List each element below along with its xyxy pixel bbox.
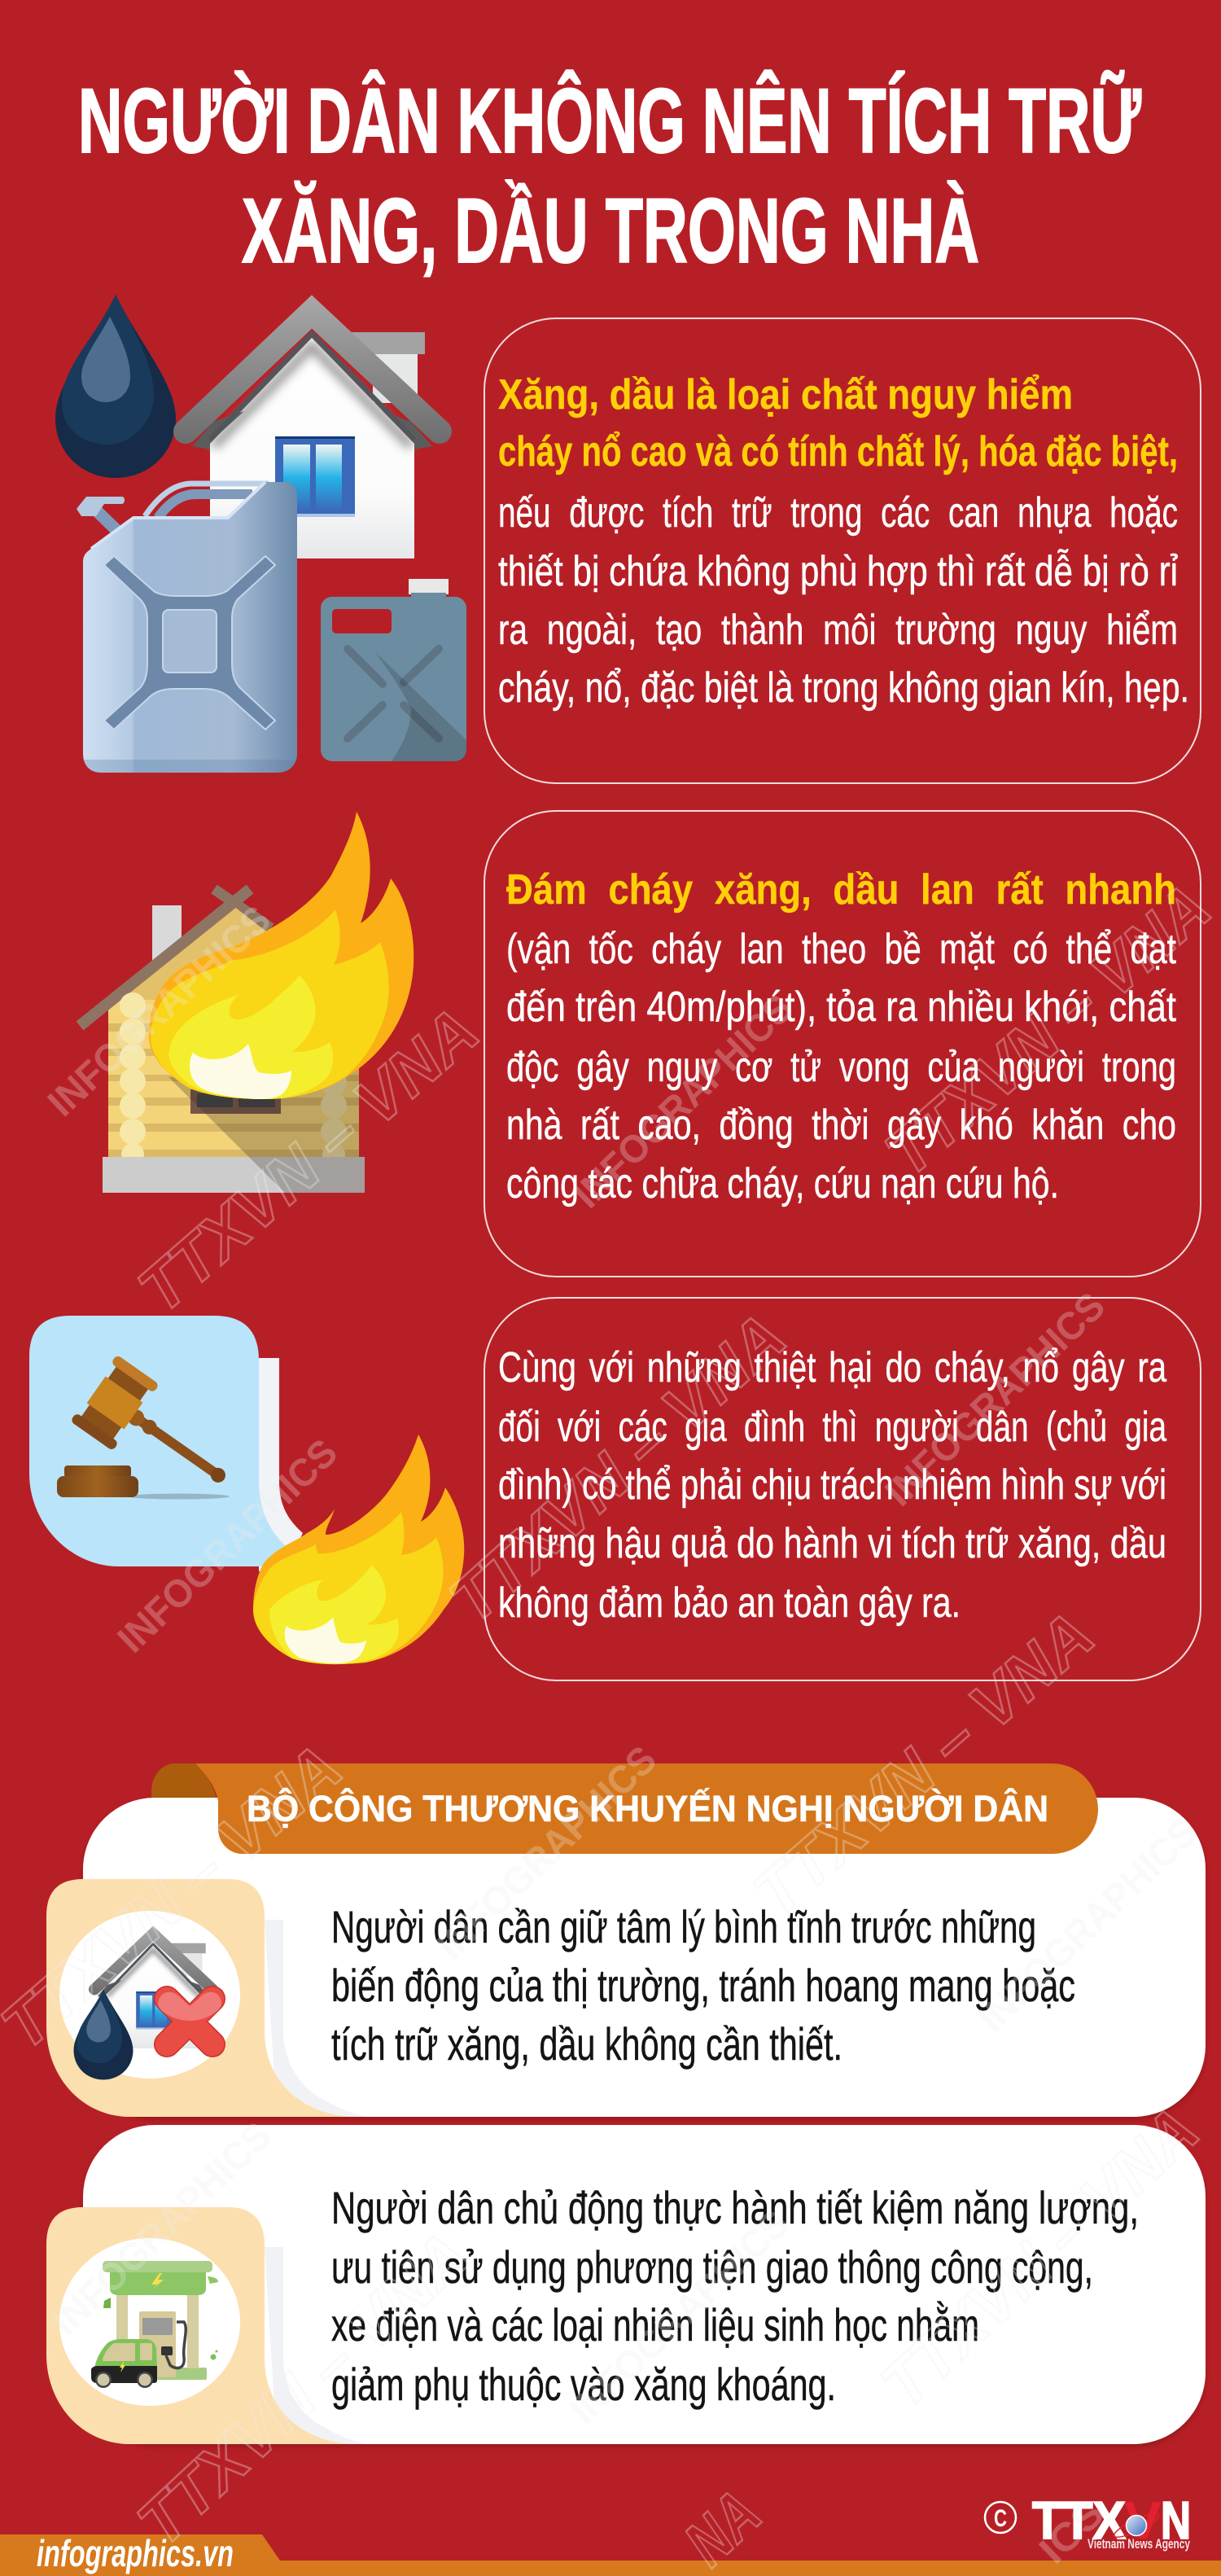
body text — [498, 489, 1189, 712]
highlighted statement — [498, 371, 1178, 475]
banner fold — [151, 1763, 218, 1807]
body text: công tác chữa cháy, cứu nạn cứu hộ. — [506, 1160, 1059, 1207]
logo: TTXVN copyright mark: C — [994, 2505, 1007, 2532]
watermarks: TTXVN – VNA — [868, 2093, 1212, 2421]
icon: house — [186, 312, 440, 559]
panel: light blue gavel card — [29, 1316, 342, 1566]
watermarks — [0, 870, 1221, 2576]
watermarks: INFOGRAPHICS — [110, 1431, 346, 1661]
logo: TTXVN copyright mark — [985, 2491, 1191, 2552]
icon: log house — [80, 889, 365, 1193]
watermarks: TTXVN – VNA — [436, 1299, 799, 1636]
watermarks: TTXVN – VNA — [740, 1598, 1107, 1930]
text: save energy — [331, 2182, 1139, 2410]
watermarks: INFOGRAPHICS — [44, 2114, 280, 2344]
footer bar: infographics.vn — [37, 2532, 234, 2574]
panel: spread text — [484, 811, 1201, 1277]
panel: recommendation 2 — [46, 2125, 1206, 2447]
banner: recommendation heading — [195, 1763, 1098, 1854]
icon: small can — [321, 579, 466, 761]
watermarks: INFOGRAPHICS — [566, 987, 802, 1216]
illustration: burning house — [80, 812, 414, 1193]
watermarks: INFOGRAPHICS — [40, 898, 279, 1125]
decorative grey band — [265, 2247, 366, 2444]
icon panel: peach card — [46, 2207, 358, 2444]
decorative grey band behind gavel panel — [259, 1358, 303, 1571]
panel: hazard text — [484, 318, 1201, 783]
logo: TTXVN copyright mark: V — [1124, 2491, 1162, 2550]
icon: house, drop and cross — [59, 1911, 240, 2079]
watermarks: INFOGRAPHICS — [562, 2202, 798, 2432]
watermarks: NA — [671, 2477, 774, 2576]
icon: gavel — [57, 1355, 247, 1513]
icon: large jerrycan — [77, 482, 297, 773]
logo: TTXVN copyright mark: N — [1161, 2491, 1191, 2550]
title — [78, 70, 1141, 282]
illustration: gavel and flame — [29, 1316, 464, 1664]
text: keep calm — [331, 1901, 1075, 2070]
banner: recommendation heading: BỘ CÔNG THƯƠNG KHUYẾN NGHỊ NGƯỜI DÂN — [247, 1788, 1048, 1829]
watermarks: TTXVN – VNA — [124, 2218, 483, 2560]
decorative grey band — [265, 1920, 366, 2117]
watermarks: TTXVN – VNA — [125, 994, 492, 1326]
illustration: oil drop, house and fuel cans — [55, 295, 466, 773]
logo: TTXVN copyright mark: TTX — [1032, 2491, 1126, 2550]
icon: flame — [253, 1435, 464, 1664]
body text — [506, 926, 1176, 1207]
icon: big flame — [149, 812, 414, 1099]
panel: liability text — [484, 1298, 1201, 1680]
footer bar — [0, 2532, 1221, 2576]
watermarks: ICS — [1031, 2491, 1113, 2572]
text: save energy: xe điện và các loại nhiên liệu sinh học nhằm — [331, 2299, 979, 2350]
text: save energy: giảm phụ thuộc vào xăng khoáng. — [331, 2359, 836, 2410]
icon: EV charging station — [59, 2238, 240, 2406]
highlighted statement: Xăng, dầu là loại chất nguy hiểm — [498, 371, 1073, 418]
watermarks: INFOGRAPHICS — [429, 1738, 665, 1968]
watermarks: INFOGRAPHICS — [970, 1811, 1206, 2040]
panel: liability text: không đảm bảo an toàn gây ra. — [498, 1579, 961, 1627]
watermarks: INFOGRAPHICS — [877, 1285, 1114, 1514]
icon: oil drop — [55, 295, 176, 478]
text: keep calm: tích trữ xăng, dầu không cần thiết. — [331, 2018, 842, 2070]
panel: recommendation 1 — [46, 1798, 1206, 2120]
icon panel: peach card — [46, 1879, 358, 2117]
